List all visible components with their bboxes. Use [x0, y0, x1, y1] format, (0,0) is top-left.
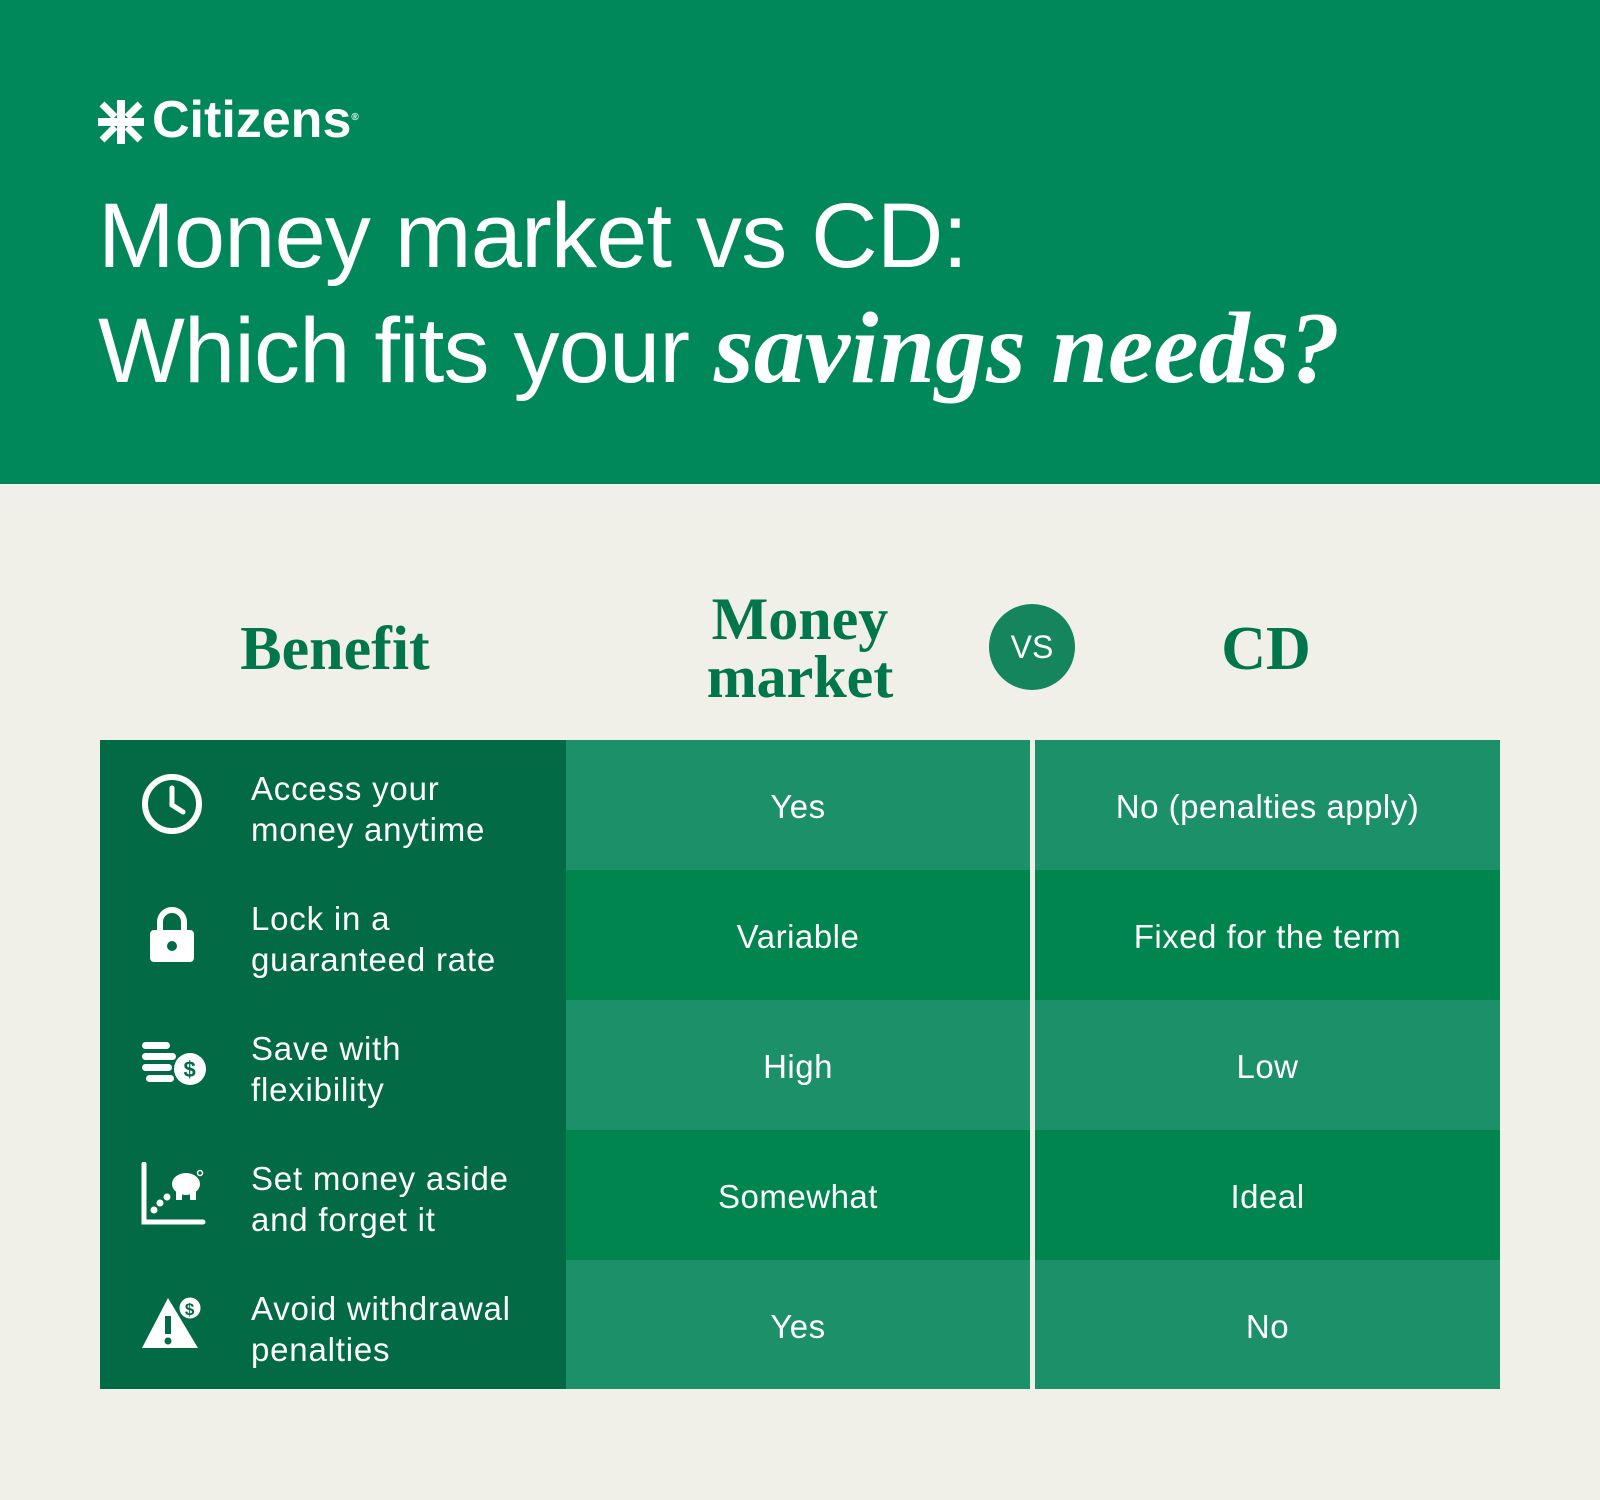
row 3: Low — [1236, 1048, 1299, 1085]
column heading: Money market: Money — [712, 586, 888, 652]
vs badge — [989, 604, 1075, 690]
row 4 — [142, 1130, 1500, 1260]
row 3: flexibility — [251, 1071, 385, 1108]
row 4: Somewhat — [718, 1178, 878, 1215]
row 3: Save with — [251, 1030, 401, 1067]
row 4: Set money aside — [251, 1160, 509, 1197]
benefit column — [100, 740, 566, 1389]
row 1 — [142, 740, 1500, 870]
column heading: Money market — [707, 586, 894, 710]
row 3: High — [763, 1048, 833, 1085]
row 2 — [150, 870, 1500, 1000]
row 5: $ — [185, 1300, 195, 1319]
row 5: No — [1246, 1308, 1289, 1344]
row 1: Access your — [251, 770, 440, 807]
row 2: Variable — [737, 918, 859, 955]
column heading: Money market: market — [707, 644, 893, 710]
table — [100, 740, 1500, 1389]
row 5 — [142, 1260, 1500, 1389]
row 5: Yes — [770, 1308, 826, 1344]
title: Which fits your savings needs? — [98, 292, 1340, 405]
row 1: Yes — [770, 788, 826, 825]
row 3: $ — [183, 1057, 197, 1082]
column heading: CD: CD — [1221, 615, 1311, 683]
row 2: Lock in a — [251, 900, 390, 937]
row 4: and forget it — [251, 1201, 436, 1238]
row 2: Fixed for the term — [1134, 918, 1401, 955]
title — [98, 185, 1340, 405]
row 1: No (penalties apply) — [1116, 788, 1419, 825]
column heading: Benefit: Benefit — [240, 615, 430, 683]
title: Money market vs CD: — [98, 185, 967, 287]
row 5: Avoid withdrawal — [251, 1290, 511, 1327]
row 4: Ideal — [1230, 1178, 1305, 1215]
header band — [0, 0, 1600, 484]
logo: Citizens® — [152, 91, 359, 149]
row 5: penalties — [251, 1331, 390, 1368]
row 3 — [142, 1000, 1500, 1130]
vs badge: VS — [1011, 628, 1053, 664]
row 2: guaranteed rate — [251, 941, 496, 978]
row 1: money anytime — [251, 811, 485, 848]
